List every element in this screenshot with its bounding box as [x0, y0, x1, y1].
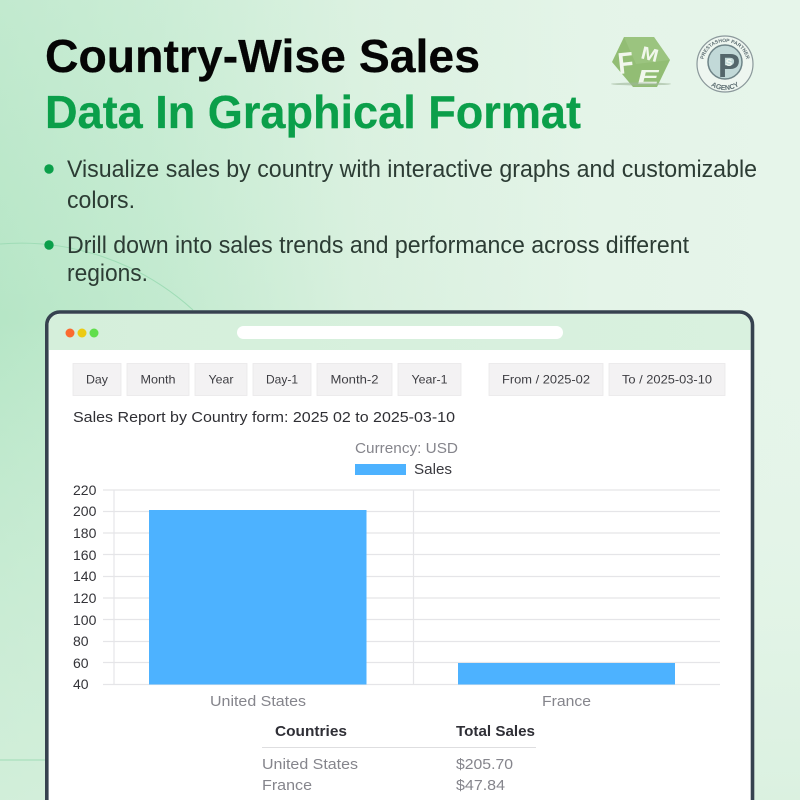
bullet: visualize sales [44, 156, 757, 214]
icon: FME cube logo: E [635, 65, 662, 88]
report heading: Sales Report by Country form: 2025 02 to 2025-03-10 [73, 409, 455, 426]
icon: FME cube logo: F [616, 46, 635, 80]
x-axis label: France: France [542, 693, 591, 710]
sales table: France [262, 777, 312, 794]
panel: browser window [47, 312, 753, 800]
title: Country-Wise Sales [45, 30, 480, 82]
y-axis labels: 100 [73, 612, 97, 628]
y-axis labels: 40 [73, 676, 89, 692]
icon: PrestaShop partner agency badge: PRESTASHOP PARTNER [700, 38, 750, 60]
y-axis labels [73, 482, 97, 692]
icon: FME cube logo [611, 37, 671, 88]
sales table: Total Sales [456, 723, 535, 740]
filter buttons: Year [208, 372, 234, 386]
bullet: drill down: regions. [67, 260, 148, 287]
filter buttons: From / 2025-02 [502, 372, 590, 386]
icon: PrestaShop partner agency badge: AGENCY [711, 82, 738, 90]
sales table [262, 723, 536, 794]
bullet: drill down [44, 232, 689, 287]
icon: PrestaShop partner agency badge: S [726, 58, 733, 69]
y-axis labels: 160 [73, 547, 97, 563]
icon: FME cube logo: M [639, 43, 661, 67]
icon: PrestaShop partner agency badge [696, 35, 754, 93]
title [45, 30, 581, 138]
y-axis labels: 220 [73, 482, 97, 498]
bar chart [73, 482, 720, 710]
sales table: Countries [275, 723, 347, 740]
icon: PrestaShop partner agency badge: P [718, 47, 740, 84]
sales table: $205.70 [456, 756, 513, 773]
x-axis label: United States: United States [210, 693, 306, 710]
chart legend [355, 461, 452, 478]
y-axis labels: 60 [73, 655, 89, 671]
filter buttons: Month-2 [330, 372, 379, 386]
browser header bar [49, 314, 751, 350]
filter buttons [73, 364, 725, 396]
currency label: Currency: USD [355, 440, 458, 457]
chart legend: Sales [414, 461, 452, 478]
bullet: visualize sales: colors. [67, 187, 135, 214]
filter buttons: Day [86, 372, 108, 386]
y-axis labels: 140 [73, 568, 97, 584]
y-axis labels: 180 [73, 525, 97, 541]
filter buttons: Day-1 [266, 372, 298, 386]
filter buttons: Month [140, 372, 176, 386]
y-axis labels: 200 [73, 503, 97, 519]
gridlines [103, 490, 720, 684]
filter buttons: Year-1 [412, 372, 448, 386]
title: Data In Graphical Format [45, 86, 581, 138]
sales table: United States [262, 756, 358, 773]
bar: United States [149, 510, 366, 684]
bullet list [44, 156, 757, 287]
y-axis labels: 80 [73, 633, 89, 649]
sales table: $47.84 [456, 777, 505, 794]
filter buttons: To / 2025-03-10 [622, 372, 712, 386]
bullet: visualize sales: Visualize sales by country with interactive graphs and customizable [67, 156, 757, 183]
y-axis labels: 120 [73, 590, 97, 606]
bar: France [458, 663, 675, 684]
bullet: drill down: Drill down into sales trends and performance across different [67, 232, 689, 259]
